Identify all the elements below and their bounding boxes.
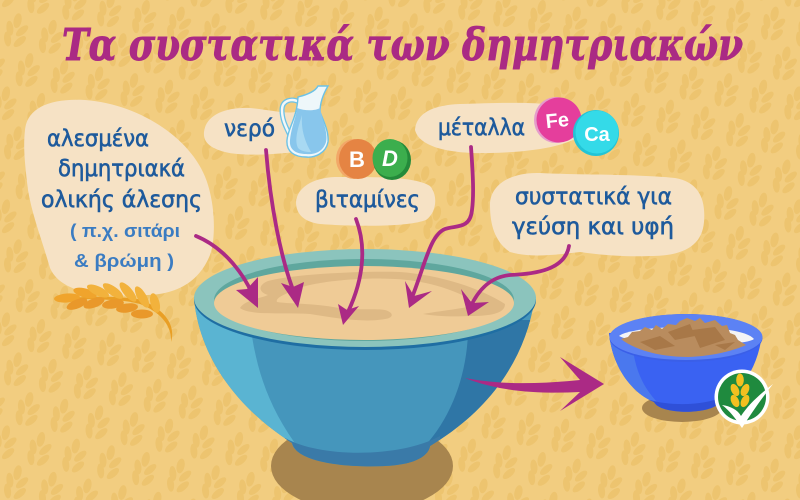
example line 2: & βρώμη ) [74,251,174,271]
cereal bowl rim [610,314,762,362]
label line 2: δημητριακά [58,156,185,182]
icon: whole grain badge [714,370,773,428]
arrow: minerals to bowl [405,147,473,308]
bowl inner wall [214,259,514,341]
milk [619,327,754,345]
arrow: vitamins to bowl [338,219,362,325]
panel: bubble vitamins [296,177,435,226]
bowl body [194,301,533,466]
soup swirl shading [240,272,505,320]
cereal flakes [621,318,746,357]
soup surface [214,266,514,340]
label line 1: αλεσμένα [47,126,149,152]
label line 2: γεύση και υφή [512,214,674,240]
arrow: water to bowl [266,150,304,308]
bowl rim [194,250,536,350]
panel: cereal bowl [605,314,765,422]
label water: νερό [224,116,275,142]
badge wheat [729,374,751,408]
arrow: grains to bowl [196,236,258,308]
icon: calcium pill [573,110,619,156]
icon: vitamin D pill: D [382,146,398,171]
bowl shadow [271,420,453,500]
icon: iron pill [534,97,582,143]
label minerals: μέταλλα [438,115,525,141]
panel: bubble taste and texture [490,173,704,256]
icon: wheat ear [54,280,172,342]
icon: water jug [282,86,328,157]
panel: bubble whole grains [24,100,214,296]
badge circle [714,370,770,424]
arrow: bowl to cereal [465,357,604,411]
label line 3: ολικής άλεσης [41,187,202,213]
icon: calcium pill: Ca [584,124,611,146]
panel: bubble water [204,108,295,155]
arrow: flavourings to bowl [461,246,569,316]
icon: vitamin D pill [372,139,411,180]
badge check mark [722,384,773,428]
bubble shape [24,100,214,296]
bubble shape [296,177,435,226]
cereal bowl shadow [642,394,722,422]
panel: bubble minerals [415,103,586,153]
label vitamins: βιταμίνες [315,187,420,213]
bubble shape [490,173,704,256]
icon: vitamin B pill [336,139,377,179]
icon: vitamin B pill: B [349,147,365,172]
bubble shape [204,108,295,155]
icon: iron pill: Fe [545,109,570,133]
panel: large bowl with soup [190,249,540,500]
cereal bowl body [609,333,761,412]
example line 1: ( π.χ. σιτάρι [70,221,180,241]
label line 1: συστατικά για [515,184,672,210]
bubble shape [415,103,586,153]
